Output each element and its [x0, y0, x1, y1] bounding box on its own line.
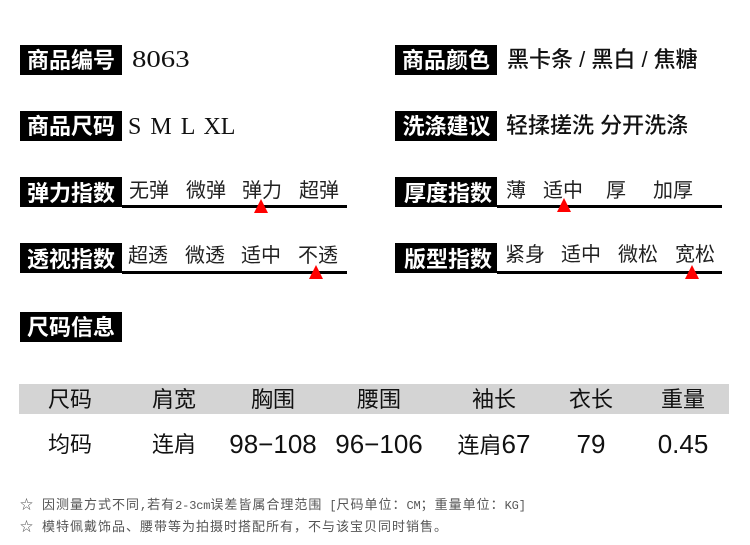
fit options: 适中	[561, 244, 601, 266]
transparency options: 不透	[298, 245, 338, 267]
table header row: 胸围	[251, 387, 295, 412]
table header row: 腰围	[357, 387, 401, 412]
thickness options: 加厚	[653, 180, 693, 202]
fit options: 宽松	[675, 244, 715, 266]
table data row: 均码	[48, 432, 92, 457]
thickness marker	[557, 198, 571, 212]
label: product colour: 商品颜色	[402, 48, 490, 73]
thickness label: 厚度指数	[404, 181, 492, 206]
elasticity options: 弹力	[242, 180, 282, 202]
table header row	[19, 384, 729, 414]
elasticity marker	[254, 199, 268, 213]
label: product size: 商品尺码	[27, 114, 115, 139]
table data row: 96−106	[335, 429, 423, 459]
footnote: measurement tolerance: 因测量方式不同,若有2-3cm误差皆属合理范围 [尺码单位：CM；重量单位：KG]	[42, 498, 526, 513]
table data row: 98−108	[229, 429, 317, 459]
heading: size information: 尺码信息	[27, 315, 115, 340]
table: size chart	[19, 384, 729, 459]
panel: transparency index	[20, 243, 347, 279]
value: product colour: 黑卡条 / 黑白 / 焦糖	[507, 47, 698, 72]
fit scale rule	[497, 271, 722, 274]
elasticity scale rule	[122, 205, 347, 208]
label: product number: 商品编号	[27, 48, 115, 73]
transparency options: 微透	[185, 245, 225, 267]
thickness options	[506, 180, 693, 202]
fit label: 版型指数	[404, 247, 492, 272]
fit marker	[685, 265, 699, 279]
table data row: 0.45	[658, 429, 708, 459]
transparency scale rule	[122, 271, 347, 274]
table header row: 肩宽	[152, 387, 196, 412]
table header row: 袖长	[472, 387, 516, 412]
panel: elasticity index	[20, 177, 347, 213]
panel: fit index	[395, 243, 722, 279]
table data row: 连肩67	[458, 429, 530, 459]
footnote: accessories not included: 模特佩戴饰品、腰带等为拍摄时搭配所有，不与该宝贝同时销售。	[42, 520, 448, 535]
thickness options: 薄	[506, 180, 526, 202]
table header row: 衣长	[569, 387, 613, 412]
table header row: 尺码	[48, 387, 92, 412]
fit options: 紧身	[505, 244, 545, 266]
value: washing advice: 轻揉搓洗 分开洗涤	[506, 113, 688, 138]
value: product number: 8063	[132, 47, 190, 73]
transparency marker	[309, 265, 323, 279]
transparency options: 超透	[128, 245, 168, 267]
footnote: measurement tolerance: ☆	[20, 498, 33, 513]
elasticity options: 微弹	[186, 180, 226, 202]
table data row	[48, 429, 708, 459]
label: washing advice: 洗涤建议	[402, 114, 490, 139]
thickness options: 厚	[606, 180, 626, 202]
fit options: 微松	[618, 244, 658, 266]
table data row: 连肩	[152, 432, 196, 457]
thickness options: 适中	[543, 180, 583, 202]
thickness scale rule	[497, 205, 722, 208]
footnote: accessories not included: ☆	[20, 520, 33, 535]
elasticity options: 超弹	[299, 180, 339, 202]
table header row: 重量	[661, 387, 705, 412]
elasticity options	[129, 180, 339, 202]
elasticity options: 无弹	[129, 180, 169, 202]
elasticity label: 弹力指数	[27, 181, 115, 206]
table data row: 79	[577, 429, 605, 459]
value: product sizes: S M L XL	[128, 114, 235, 140]
transparency options	[128, 245, 338, 267]
transparency options: 适中	[241, 245, 281, 267]
fit options	[505, 244, 715, 266]
panel: thickness index	[395, 177, 722, 212]
transparency label: 透视指数	[27, 247, 115, 272]
